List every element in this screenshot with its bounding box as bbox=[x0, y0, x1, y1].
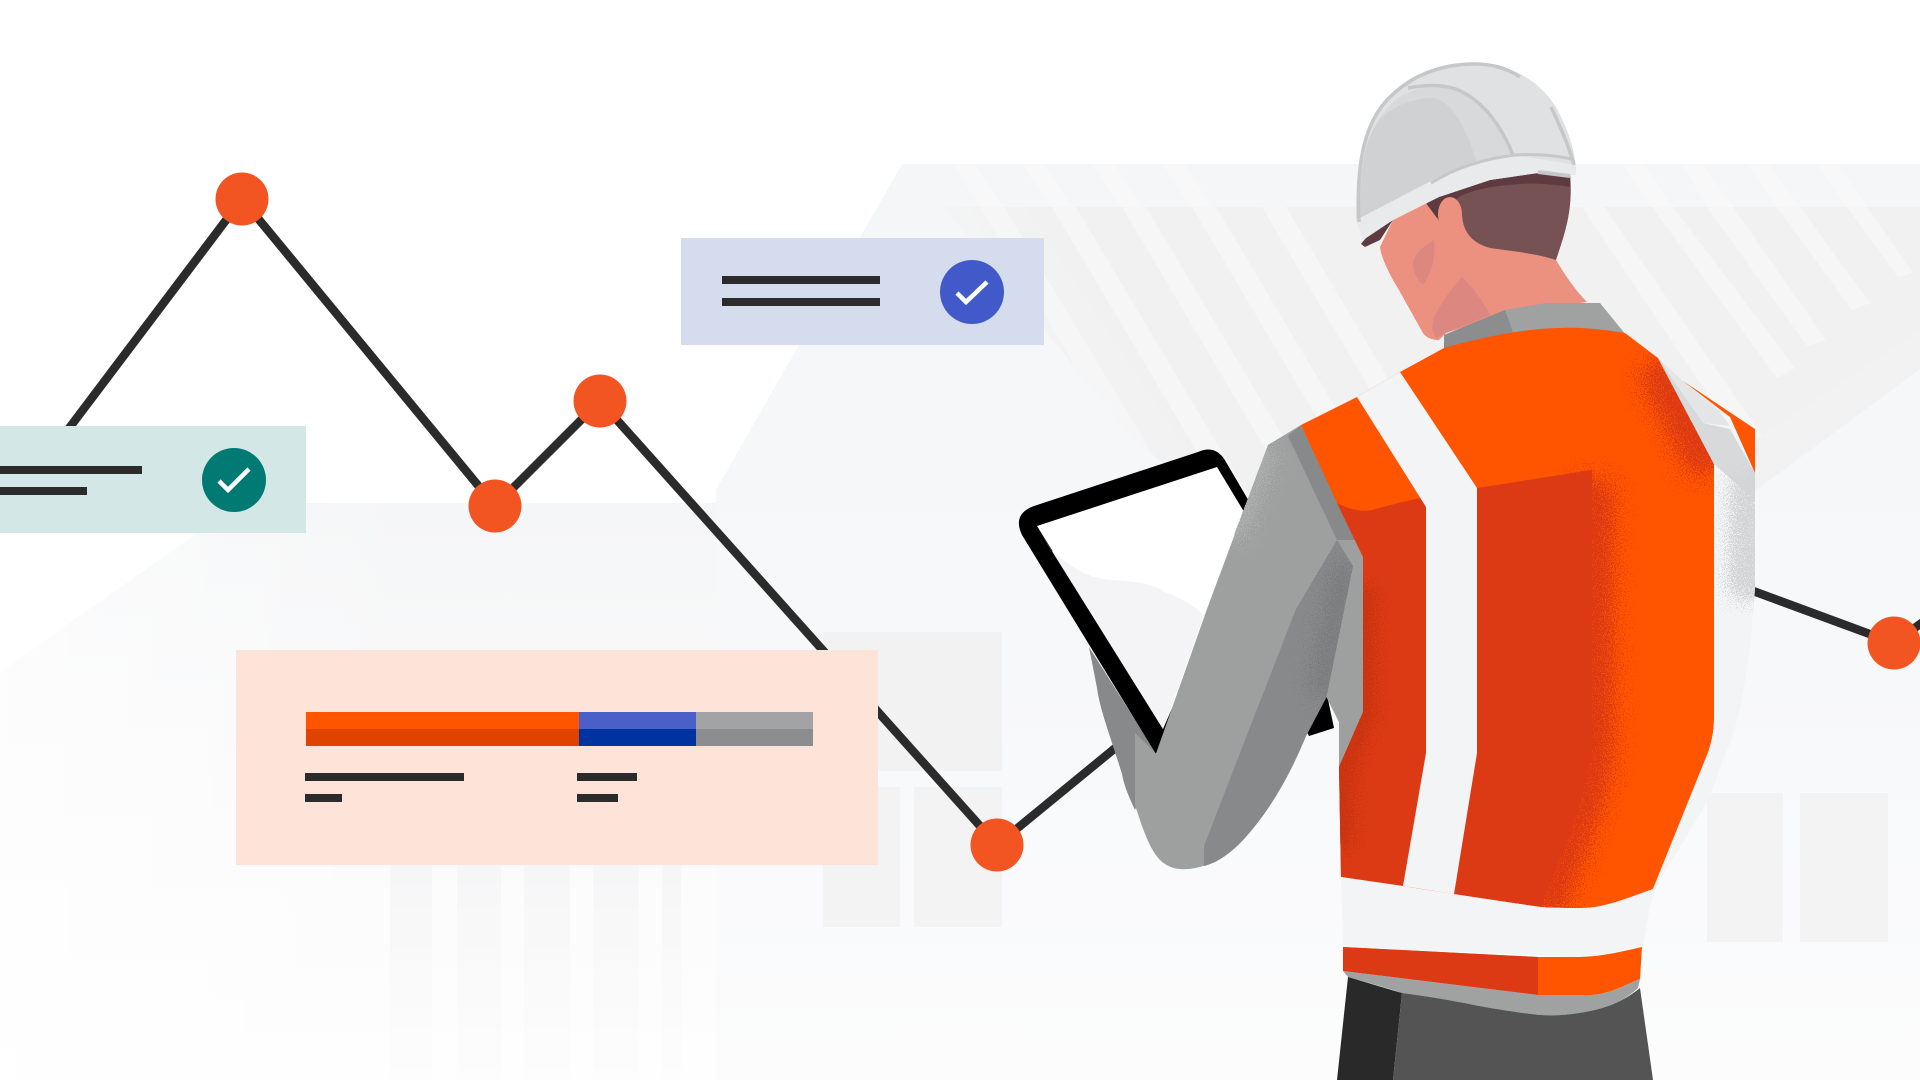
shirt collar bbox=[1444, 303, 1626, 352]
panel: blue checked card bbox=[681, 238, 1044, 345]
icon: teal check badge bbox=[202, 448, 266, 512]
vest: shadow stipple bbox=[1541, 358, 1716, 915]
vest: darker left panel bbox=[1337, 498, 1426, 886]
data point: low bbox=[970, 818, 1024, 872]
icon: blue check badge bbox=[940, 260, 1004, 324]
vest: bottom reflective band bbox=[1341, 877, 1653, 957]
hard hat bbox=[1356, 63, 1576, 247]
stacked bar bbox=[306, 712, 813, 746]
background: faint warehouse buildings bbox=[282, 164, 1920, 942]
vest: left reflective stripe bbox=[1357, 372, 1477, 894]
panel: teal checked card bbox=[0, 426, 306, 533]
sleeve and arm bbox=[1135, 425, 1363, 869]
hand shadow behind tablet bbox=[1089, 647, 1156, 810]
vest: right reflective stripe bbox=[1620, 358, 1755, 947]
data point: second peak bbox=[574, 374, 626, 428]
line chart trend line bbox=[30, 199, 1920, 845]
vest: bottom hem bbox=[1343, 947, 1642, 995]
high-visibility vest bbox=[1301, 328, 1755, 995]
vest: darker centre panel bbox=[1454, 470, 1592, 907]
data point: right bbox=[1868, 616, 1920, 670]
data point: peak bbox=[216, 172, 268, 226]
vest: right shoulder wedge bbox=[1683, 381, 1755, 473]
shirt hem bbox=[1343, 971, 1640, 1015]
data point: first dip bbox=[468, 480, 522, 532]
panel: peach stacked bar card bbox=[236, 650, 878, 865]
tablet bbox=[1019, 450, 1334, 754]
trousers bbox=[1337, 977, 1653, 1080]
neck and head bbox=[1380, 173, 1587, 340]
figure: site worker with tablet bbox=[1019, 63, 1755, 1080]
